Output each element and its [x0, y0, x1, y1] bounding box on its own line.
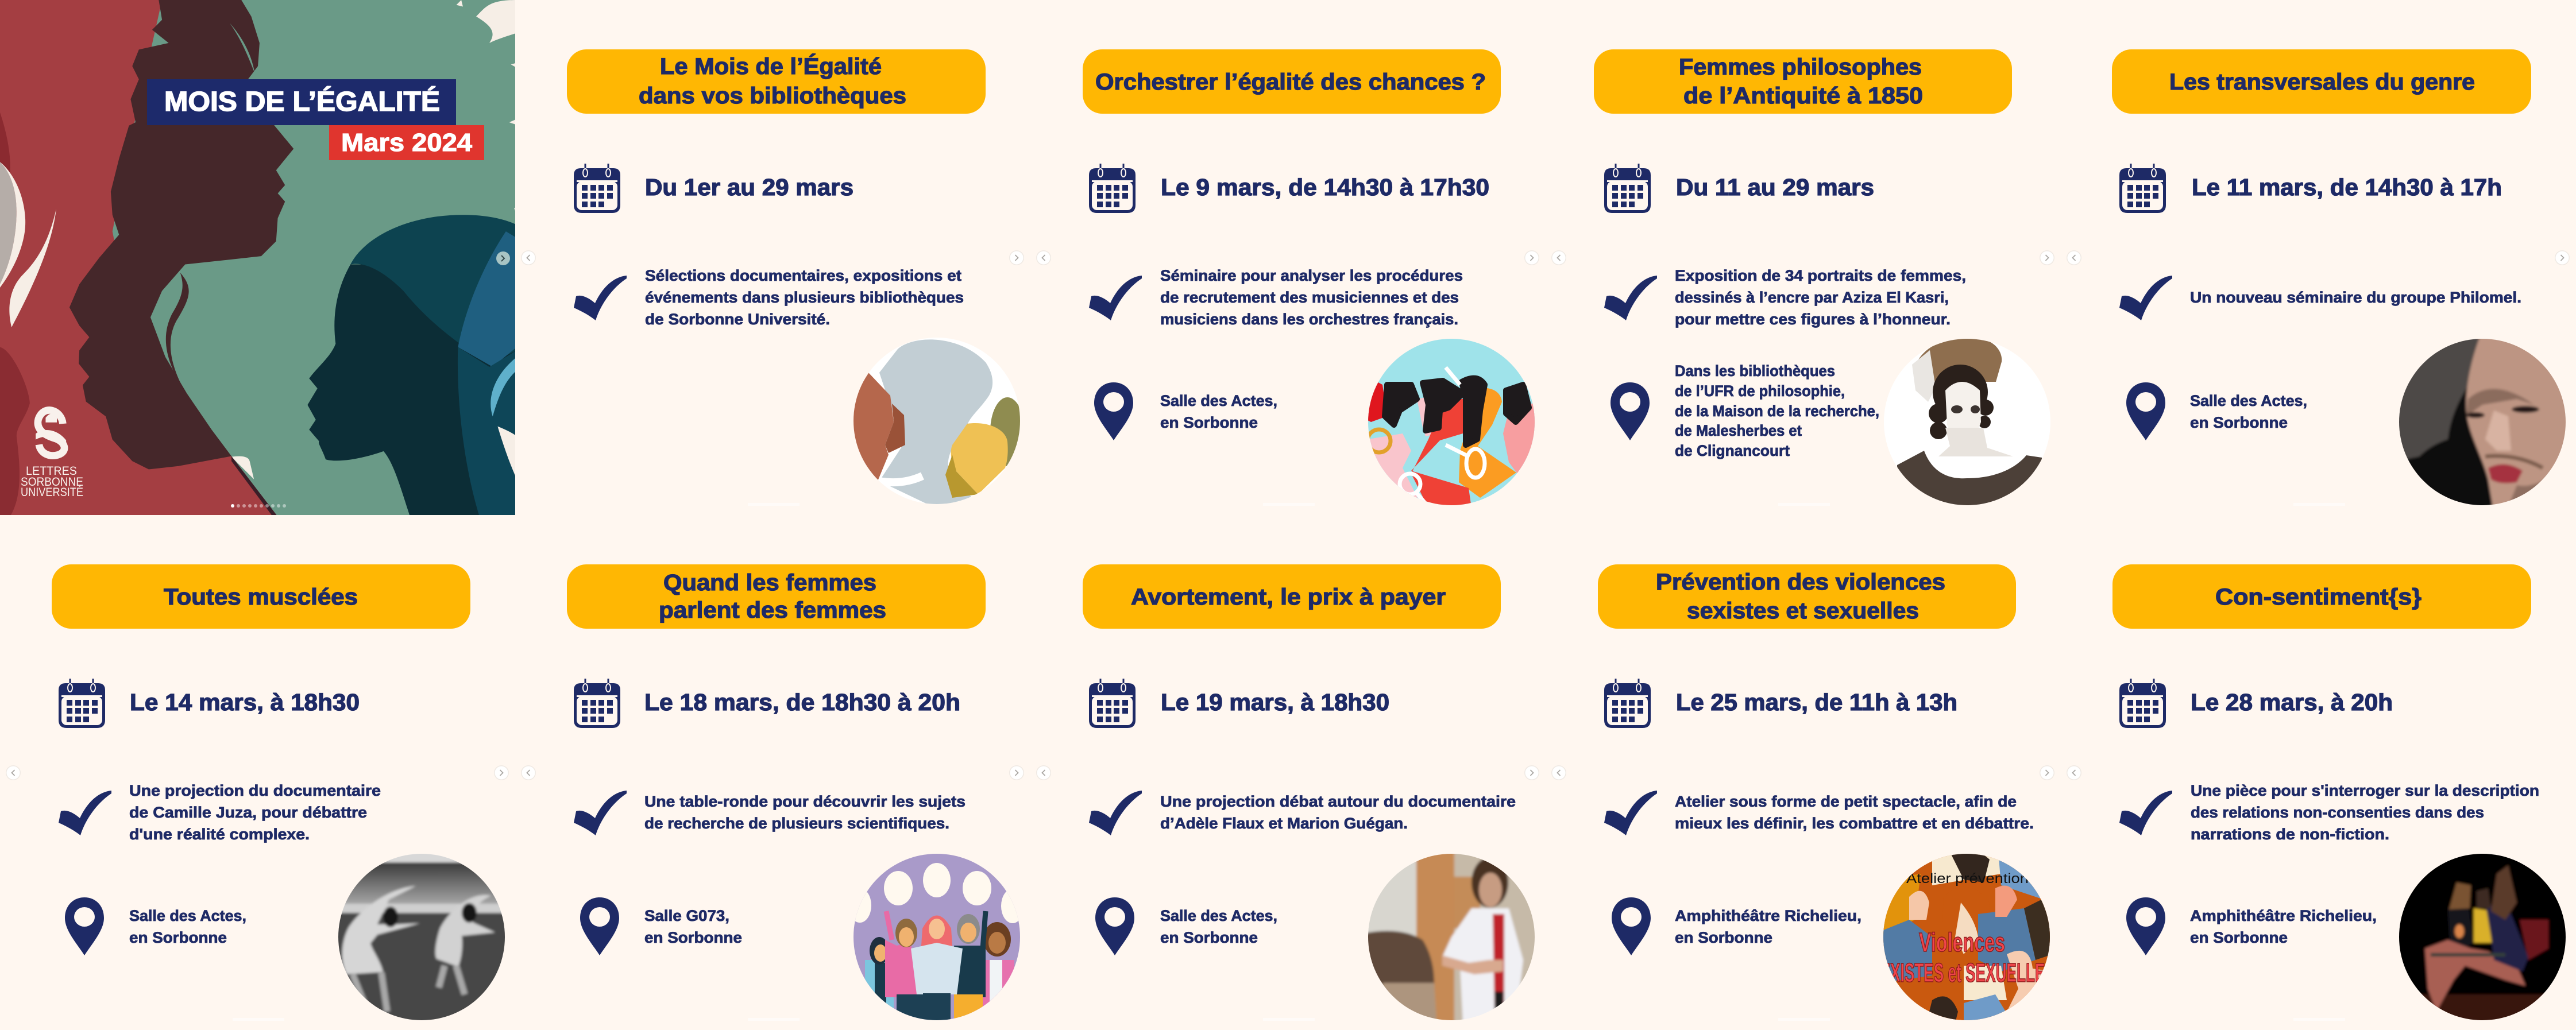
image: crowd illustration with workshop title: Violences [1919, 927, 2005, 957]
heading pill: Prévention des violences [1656, 570, 1945, 595]
location: Salle des Actes, [129, 907, 246, 924]
icon: location pin [65, 897, 104, 955]
description [129, 782, 381, 843]
heading pill [567, 564, 986, 629]
panel: Prévention des violences sexistes et sexuelles [1598, 564, 2055, 1023]
location: de la Maison de la recherche, [1675, 402, 1879, 420]
image: women profiles with gender symbols [1365, 336, 1538, 508]
description: de recherche de plusieurs scientifiques. [644, 815, 949, 832]
panel: Femmes philosophes de l'Antiquité à 1850 [1594, 49, 2051, 508]
heading pill: Les transversales du genre [2169, 69, 2475, 95]
heading pill [1594, 49, 2012, 114]
location: Salle des Actes, [1160, 392, 1277, 409]
description: mieux les définir, les combattre et en débattre. [1675, 815, 2034, 832]
image: ink portrait of a woman [1883, 338, 2051, 508]
description: Atelier sous forme de petit spectacle, afin de [1675, 793, 2017, 810]
date: Le 25 mars, de 11h à 13h [1676, 689, 1957, 715]
description [644, 793, 965, 832]
image: crowd illustration with workshop title: SEXISTES et SEXUELLES [1870, 958, 2055, 988]
heading pill: parlent des femmes [659, 598, 886, 623]
description [1160, 267, 1463, 328]
heading pill: Le Mois de l’Égalité [660, 53, 882, 79]
description: Une projection du documentaire [129, 782, 381, 799]
carousel dots [231, 504, 286, 508]
heading pill [1083, 564, 1501, 629]
title banner [147, 79, 456, 125]
image: close-up portrait [2399, 339, 2566, 505]
location: en Sorbonne [1675, 929, 1772, 946]
icon: location pin [2126, 897, 2165, 955]
location [1160, 907, 1277, 946]
date: Le 19 mars, à 18h30 [1161, 689, 1389, 715]
location: Salle des Actes, [1160, 907, 1277, 924]
icon: check [1089, 791, 1142, 835]
icon: location pin [1611, 382, 1650, 440]
description: de Camille Juza, pour débattre [129, 804, 367, 821]
image: crowd illustration with workshop title [1883, 854, 2050, 1020]
heading pill: Avortement, le prix à payer [1131, 584, 1446, 610]
icon: calendar [574, 679, 620, 728]
panel: Les transversales du genre [2112, 49, 2574, 514]
location: en Sorbonne [1160, 929, 1258, 946]
panel: Le Mois de l'Égalité dans vos bibliothèques [567, 49, 1025, 508]
date: Le 14 mars, à 18h30 [130, 689, 360, 715]
heading pill: dans vos bibliothèques [639, 83, 906, 109]
icon: location pin [1095, 897, 1134, 955]
location: en Sorbonne [2190, 414, 2288, 431]
icon: location pin [580, 897, 619, 955]
location [2190, 392, 2307, 431]
image: doctor in white coat photo [1368, 854, 1535, 1020]
description: d'une réalité complexe. [129, 826, 310, 843]
description [1160, 793, 1516, 832]
heading pill: Femmes philosophes [1679, 55, 1922, 80]
heading pill [567, 49, 986, 114]
location [1160, 392, 1277, 431]
date: Le 28 mars, à 20h [2191, 689, 2393, 715]
icon: check [2119, 276, 2172, 320]
date: Le 11 mars, de 14h30 à 17h [2192, 174, 2502, 200]
location [2190, 907, 2377, 946]
icon: calendar [2119, 679, 2166, 728]
location: Salle G073, [644, 907, 729, 924]
description [2191, 782, 2539, 843]
icon: check [59, 791, 111, 835]
icon: check [1089, 276, 1142, 320]
description: Une pièce pour s'interroger sur la description [2191, 782, 2539, 799]
description [1675, 267, 1966, 328]
description: des relations non-consenties dans des [2191, 804, 2484, 821]
description: dessinés à l’encre par Aziza El Kasri, [1675, 289, 1949, 306]
location: de Malesherbes et [1675, 422, 1802, 439]
description: de recrutement des musiciennes et des [1160, 289, 1459, 306]
icon: check [1604, 791, 1657, 835]
description: de Sorbonne Université. [645, 311, 830, 328]
date banner: Mars 2024 [341, 129, 473, 157]
location: de Clignancourt [1675, 442, 1790, 459]
logo: Lettres Sorbonne Université [21, 410, 83, 499]
icon: check [1604, 276, 1657, 320]
location: en Sorbonne [644, 929, 742, 946]
heading pill: Toutes musclées [164, 584, 358, 610]
heading pill: sexistes et sexuelles [1687, 598, 1919, 624]
icon: calendar [59, 679, 105, 728]
location: en Sorbonne [1160, 414, 1258, 431]
icon: calendar [2119, 164, 2166, 213]
title banner: MOIS DE L’ÉGALITÉ [164, 86, 440, 117]
image: gymnasts black and white photo [338, 854, 505, 1020]
image: theatre scene photo [2399, 854, 2566, 1020]
description [645, 267, 964, 328]
date: Le 18 mars, de 18h30 à 20h [644, 689, 960, 715]
location [1675, 907, 1861, 946]
location [1675, 362, 1879, 459]
description: Exposition de 34 portraits de femmes, [1675, 267, 1966, 284]
logo: Lettres Sorbonne Université: SORBONNE [21, 475, 83, 489]
icon: calendar [1089, 679, 1136, 728]
location [129, 907, 246, 946]
heading pill: Con-sentiment{s} [2215, 584, 2421, 610]
location [644, 907, 742, 946]
description: musiciens dans les orchestres français. [1160, 311, 1458, 328]
image: group of women with speech bubbles [848, 851, 1024, 1023]
description: Séminaire pour analyser les procédures [1160, 267, 1463, 284]
description: événements dans plusieurs bibliothèques [645, 289, 964, 306]
image: overlapping profiles [851, 337, 1025, 508]
carousel arrow [496, 251, 510, 265]
location: Dans les bibliothèques [1675, 362, 1835, 380]
icon: calendar [1089, 164, 1136, 213]
date: Du 11 au 29 mars [1676, 174, 1874, 200]
panel: Orchestrer l'égalité des chances ? [1083, 49, 1538, 508]
panel: Toutes musclées [52, 564, 513, 1029]
date: Du 1er au 29 mars [645, 174, 853, 200]
location: en Sorbonne [2190, 929, 2288, 946]
description: narrations de non-fiction. [2191, 826, 2389, 843]
description: Sélections documentaires, expositions et [645, 267, 961, 284]
description: d’Adèle Flaux et Marion Guégan. [1160, 815, 1408, 832]
heading pill: Orchestrer l’égalité des chances ? [1095, 69, 1486, 95]
heading pill [52, 564, 470, 629]
icon: check [574, 791, 627, 835]
illustration: three silhouettes [0, 0, 517, 517]
date: Le 9 mars, de 14h30 à 17h30 [1161, 174, 1489, 200]
icon: location pin [2126, 382, 2165, 440]
icon: check [574, 276, 627, 320]
carousel dots (faint, on slides) [233, 503, 2345, 1021]
carousel nav buttons [6, 250, 2570, 780]
icon: location pin [1094, 382, 1133, 440]
heading pill: Quand les femmes [663, 570, 876, 595]
icon: calendar [574, 164, 620, 213]
panel: cover poster [0, 0, 517, 517]
description: Un nouveau séminaire du groupe Philomel. [2190, 289, 2521, 306]
location: Amphithéâtre Richelieu, [1675, 907, 1861, 924]
panel: Avortement, le prix à payer [1083, 564, 1543, 1029]
description: pour mettre ces figures à l’honneur. [1675, 311, 1951, 328]
icon: calendar [1604, 679, 1651, 728]
icon: location pin [1612, 897, 1651, 955]
logo: Lettres Sorbonne Université: LETTRES [26, 464, 77, 478]
description [1675, 793, 2034, 832]
location: Salle des Actes, [2190, 392, 2307, 409]
location: Amphithéâtre Richelieu, [2190, 907, 2377, 924]
date banner [329, 125, 484, 160]
image: crowd illustration with workshop title: Atelier prévention [1906, 871, 2029, 886]
location: en Sorbonne [129, 929, 227, 946]
heading pill [1083, 49, 1501, 114]
heading pill [2112, 564, 2531, 629]
location: de l’UFR de philosophie, [1675, 382, 1845, 400]
description: Une table-ronde pour découvrir les sujets [644, 793, 965, 810]
logo: Lettres Sorbonne Université: UNIVERSITÉ [21, 486, 83, 499]
heading pill: de l’Antiquité à 1850 [1683, 83, 1923, 109]
heading pill [1598, 564, 2016, 629]
panel: Quand les femmes parlent des femmes [567, 564, 1024, 1023]
icon: calendar [1604, 164, 1651, 213]
heading pill [2112, 49, 2531, 114]
icon: check [2119, 791, 2172, 835]
description: Une projection débat autour du documentaire [1160, 793, 1516, 810]
panel: Con-sentiment{s} [2112, 564, 2574, 1029]
